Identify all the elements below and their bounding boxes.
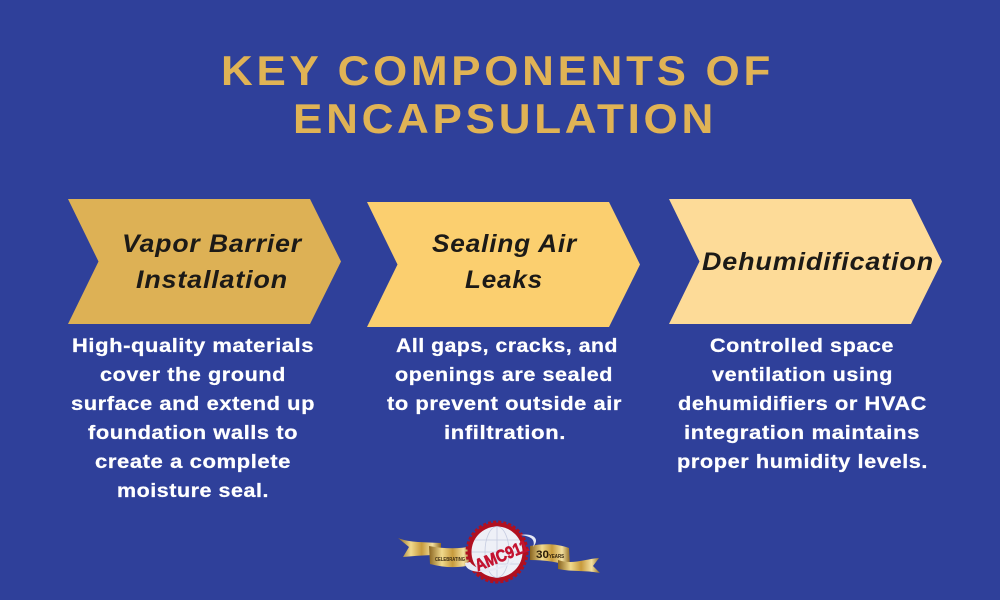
- text: dehumidification description: dehumidifiers or HVAC: [678, 393, 927, 415]
- text: sealing air leaks description: openings are sealed: [395, 364, 613, 386]
- text: sealing air leaks description: infiltration.: [444, 422, 566, 444]
- logo: AMC911 celebrating 30 years: [398, 522, 600, 582]
- seal: white globe: [472, 526, 522, 578]
- panel: dehumidification: [669, 199, 942, 473]
- text: dehumidification description: integration maintains: [684, 422, 920, 444]
- chevron: vapor barrier: [68, 199, 341, 324]
- ribbon: left tail: [398, 538, 441, 557]
- heading: vapor barrier: Vapor Barrier: [122, 230, 302, 258]
- text: dehumidification description: ventilation using: [712, 364, 893, 386]
- title: KEY COMPONENTS OF: [221, 47, 774, 94]
- text: vapor barrier description: create a complete: [95, 451, 291, 473]
- ribbon text: celebrating: CELEBRATING: [435, 557, 465, 563]
- panel: sealing air leaks: [367, 202, 640, 444]
- text: dehumidification description: proper humidity levels.: [677, 451, 928, 473]
- text: sealing air leaks description: to prevent outside air: [387, 393, 622, 415]
- swoosh: [465, 535, 536, 572]
- text: sealing air leaks description: [387, 335, 622, 444]
- ribbon: right tail: [558, 558, 600, 573]
- heading: vapor barrier: [122, 230, 302, 294]
- logo text: AMC911: AMC911: [472, 537, 531, 575]
- heading: vapor barrier: Installation: [136, 266, 288, 294]
- heading: sealing air leaks: Leaks: [465, 266, 543, 294]
- ribbon text: 30 years: 30: [536, 549, 549, 561]
- text: dehumidification description: [677, 335, 928, 473]
- chevron: sealing air leaks: [367, 202, 640, 327]
- ribbon: right: [530, 544, 570, 566]
- ribbon text: 30 years: YEARS: [549, 554, 564, 560]
- text: vapor barrier description: surface and extend up: [71, 393, 315, 415]
- ribbon: left: [429, 546, 472, 567]
- title: ENCAPSULATION: [293, 95, 717, 142]
- heading: dehumidification: Dehumidification: [702, 248, 934, 276]
- text: vapor barrier description: [71, 335, 315, 502]
- seal: red rosette: [468, 522, 526, 582]
- text: dehumidification description: Controlled space: [710, 335, 894, 357]
- chevron: dehumidification: [669, 199, 942, 324]
- text: vapor barrier description: High-quality materials: [72, 335, 314, 357]
- text: vapor barrier description: cover the ground: [100, 364, 286, 386]
- text: sealing air leaks description: All gaps, cracks, and: [396, 335, 618, 357]
- heading: sealing air leaks: [432, 230, 577, 294]
- title: [221, 47, 774, 142]
- panel: vapor barrier installation: [68, 199, 341, 502]
- text: vapor barrier description: foundation walls to: [88, 422, 298, 444]
- text: vapor barrier description: moisture seal.: [117, 480, 269, 502]
- heading: sealing air leaks: Sealing Air: [432, 230, 577, 258]
- ribbon text: 30 years: [536, 549, 564, 561]
